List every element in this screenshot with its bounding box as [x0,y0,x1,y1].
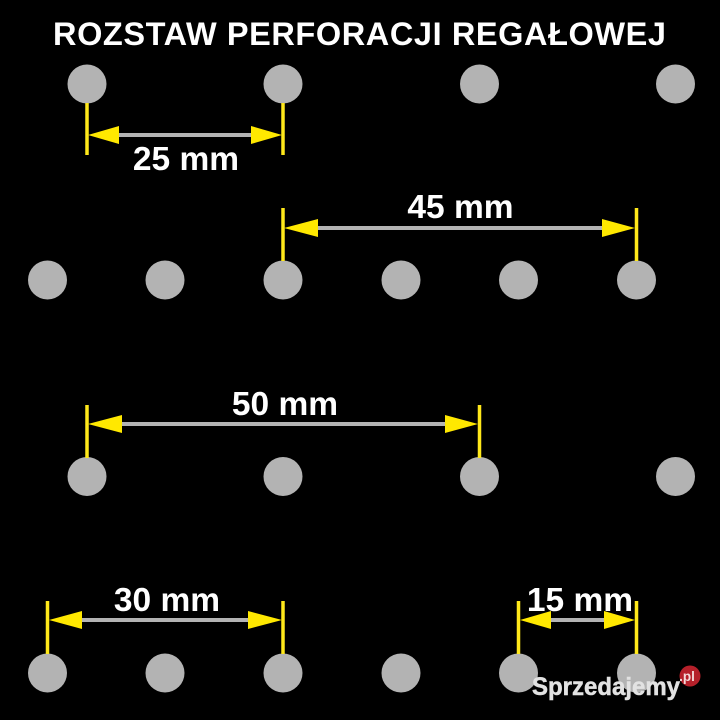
dimension: 30 mm [48,582,283,654]
watermark: Sprzedajemy.pl: Sprzedajemy [532,673,680,701]
row 4: perforation holes [28,654,656,692]
dimension: 45 mm [283,189,636,261]
dimension: 15 mm [518,582,636,654]
row 3: perforation holes [68,457,695,496]
dimension: 25 mm [87,103,283,178]
dimension: 50 mm: 50 mm [232,386,338,423]
dimension: 15 mm: 15 mm [527,582,633,619]
dimension: 30 mm: 30 mm [114,582,220,619]
watermark: Sprzedajemy.pl: .pl [679,669,695,684]
title: ROZSTAW PERFORACJI REGAŁOWEJ [53,16,666,52]
dimension: 45 mm: 45 mm [407,189,514,226]
row 1: perforation holes [68,64,695,104]
dimension: 50 mm [87,386,480,458]
dimension: 25 mm: 25 mm [133,141,239,178]
row 2: perforation holes [28,260,656,300]
